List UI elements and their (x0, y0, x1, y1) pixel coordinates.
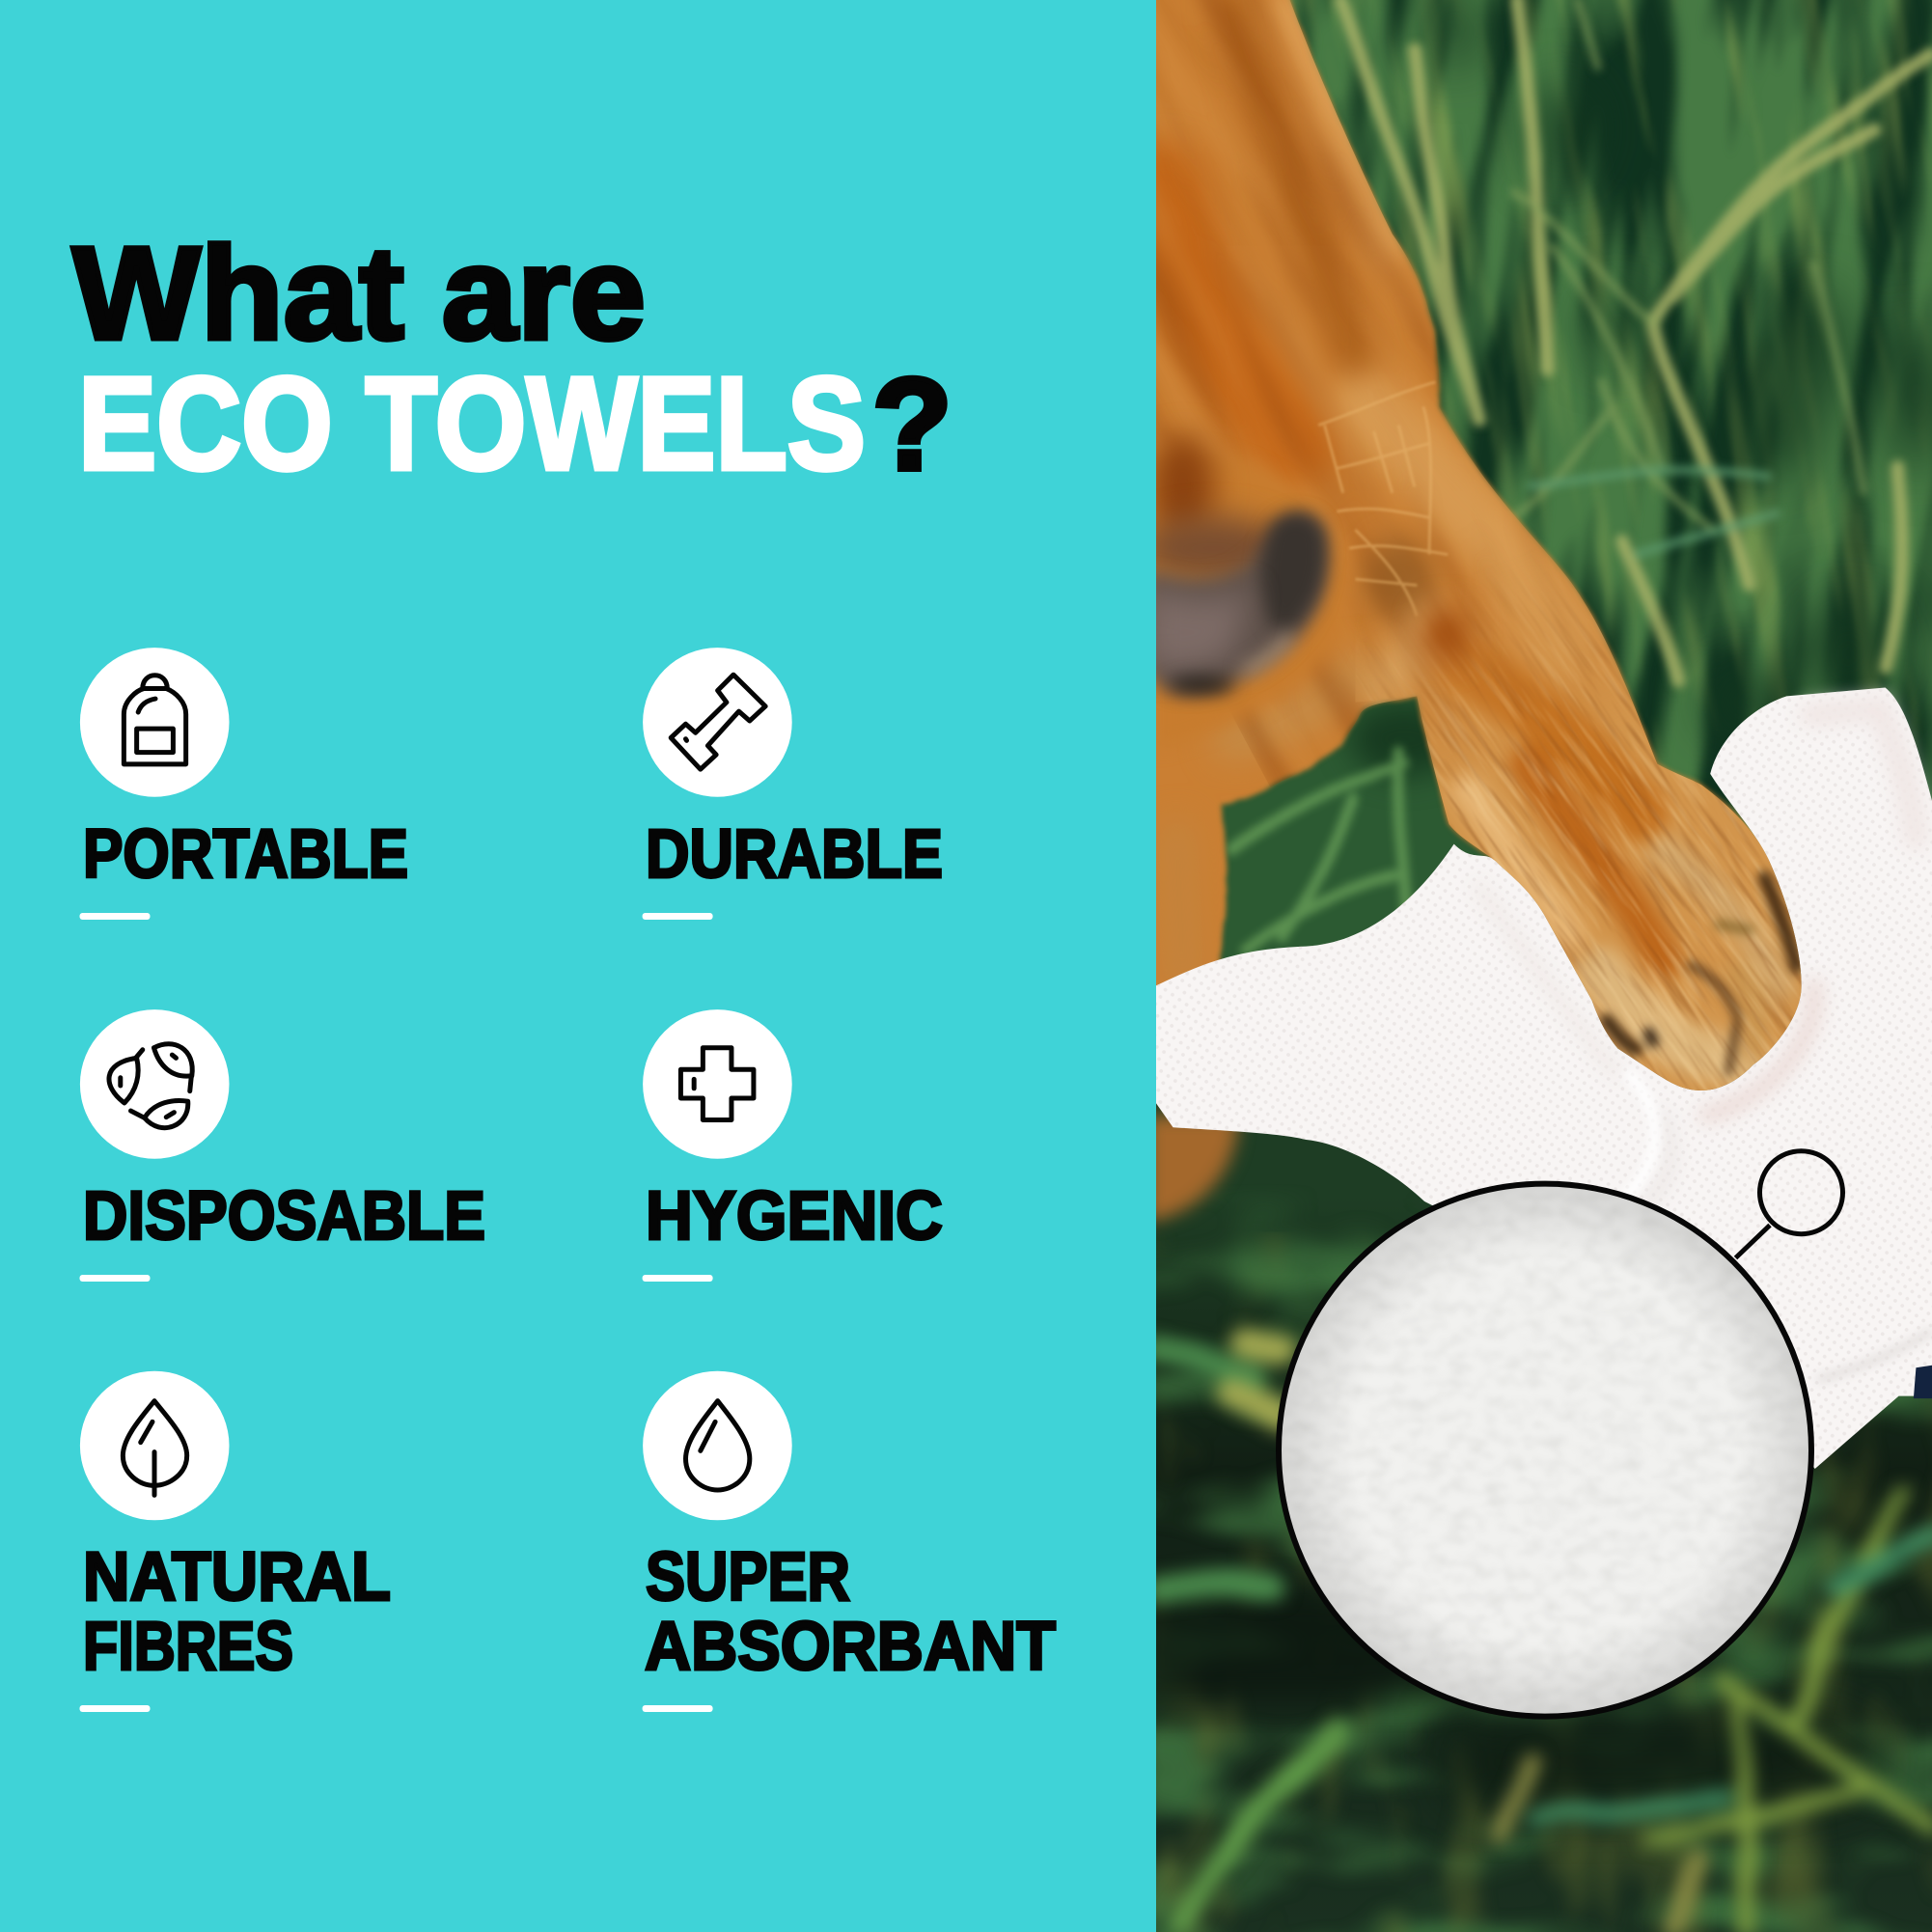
underline (643, 1275, 713, 1282)
icon: leaf (80, 1371, 230, 1520)
grass lower (1145, 1183, 1932, 1932)
icon: dumbbell (643, 648, 792, 797)
paw fur (1355, 579, 1802, 1090)
underline (79, 913, 151, 920)
icon: backpack (80, 648, 230, 797)
magnified towel texture circle (1274, 1177, 1819, 1723)
icon: water drop (643, 1371, 792, 1520)
icon: recycling leaves (80, 1009, 230, 1159)
neck wisps shade (1362, 538, 1435, 621)
grass background (1134, 0, 1932, 1932)
underline (643, 913, 713, 920)
dog body and leg (1156, 0, 1932, 1232)
label: SUPER (646, 1539, 850, 1615)
underline (79, 1705, 151, 1712)
panel: features background (0, 0, 1156, 1932)
feature: super absorbant (643, 1371, 1056, 1712)
title (72, 220, 952, 498)
navy towel corner (1914, 1366, 1932, 1398)
title: ? (872, 351, 952, 497)
underline (643, 1705, 713, 1712)
label second line: ABSORBANT (645, 1609, 1056, 1685)
loupe ring and connector (1735, 1151, 1843, 1258)
feature: durable (643, 648, 943, 920)
towel fold edge (1624, 1072, 1655, 1198)
label: HYGENIC (646, 1178, 943, 1255)
label second line: FIBRES (83, 1609, 293, 1685)
icon: medical cross (643, 1009, 792, 1159)
label: DISPOSABLE (83, 1178, 485, 1255)
feature: natural fibres (79, 1371, 391, 1712)
feature: disposable (79, 1009, 485, 1282)
label: DURABLE (646, 816, 943, 893)
feature: portable (79, 648, 408, 920)
fur wisps (1318, 382, 1448, 616)
towel (1156, 687, 1932, 1469)
fur tone patches (1165, 0, 1565, 974)
label: NATURAL (83, 1539, 391, 1615)
photo: dog paw on towel in grass (1156, 0, 1932, 1932)
underline (79, 1275, 151, 1282)
grass blades upper (1340, 0, 1932, 677)
label: PORTABLE (83, 816, 408, 893)
title: What are (72, 220, 646, 368)
dark grass under neck (1219, 697, 1488, 959)
neck dark spot (1421, 607, 1470, 662)
dog nose (1156, 423, 1341, 726)
feature: hygenic (643, 1009, 943, 1282)
title: ECO TOWELS (78, 350, 866, 498)
